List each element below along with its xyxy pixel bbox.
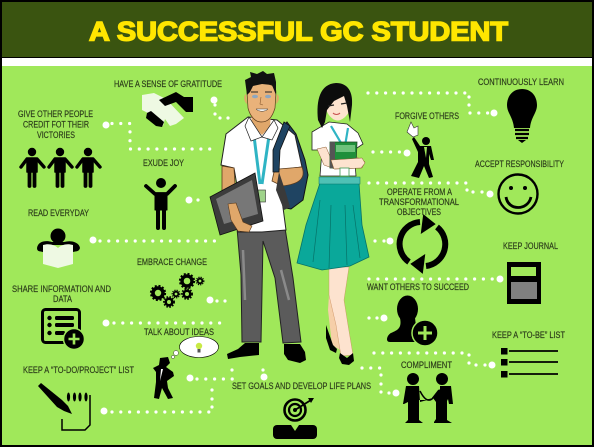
label: read everyday: READ EVERYDAY xyxy=(28,208,89,219)
eyes xyxy=(328,103,347,106)
dotted connector: gratitude xyxy=(210,96,230,120)
brows xyxy=(251,91,272,93)
label: compliment: COMPLIMENT xyxy=(401,360,452,371)
label: credit: CREDIT FOT THEIR xyxy=(23,120,89,130)
header band xyxy=(2,2,592,66)
hand on folder xyxy=(228,203,252,232)
dotted connector: talk about ideas xyxy=(186,368,234,382)
back shoe xyxy=(326,325,337,353)
forearm and fist xyxy=(272,167,303,186)
lanyard and ID xyxy=(254,136,269,184)
dotted connector: set goals xyxy=(260,368,268,380)
skirt pleats xyxy=(313,200,360,268)
shirt xyxy=(221,117,302,232)
nose xyxy=(260,97,263,105)
label: exude joy: EXUDE JOY xyxy=(143,158,184,169)
label: talk about ideas: TALK ABOUT IDEAS xyxy=(144,327,214,338)
folder panel xyxy=(216,180,258,224)
trousers xyxy=(237,228,301,343)
backpack xyxy=(273,122,308,209)
collar xyxy=(245,117,278,141)
icon: forgiving figure pointing xyxy=(407,122,434,178)
dotted connector: continuously learn xyxy=(368,93,498,116)
label: transformational objectives: OPERATE FROM A xyxy=(387,187,452,198)
icon: light bulb xyxy=(507,89,537,143)
icon: to-be list xyxy=(501,348,558,378)
label: credit xyxy=(18,109,93,141)
icon: handshake xyxy=(142,92,193,127)
ID card xyxy=(340,168,349,176)
icon: journal xyxy=(507,262,541,304)
icon: reader with book xyxy=(37,228,80,268)
hair xyxy=(245,71,276,95)
icon: target with arrow xyxy=(273,398,317,439)
icon: data list with plus xyxy=(42,310,84,350)
label: share information: DATA xyxy=(53,294,72,305)
back leg xyxy=(328,265,347,350)
label: transformational objectives xyxy=(379,187,460,218)
dotted connector: to-be list xyxy=(374,353,496,368)
hair xyxy=(318,83,352,128)
label: to-be list: KEEP A “TO-BE” LIST xyxy=(492,330,565,341)
skirt xyxy=(297,183,369,270)
head xyxy=(247,83,276,122)
label: share information xyxy=(12,284,111,305)
label: keep journal: KEEP JOURNAL xyxy=(503,241,558,252)
label: accept responsibility: ACCEPT RESPONSIBILITY xyxy=(475,159,564,170)
dotted connector: embrace change xyxy=(206,296,227,304)
waistband xyxy=(319,177,360,184)
label: set goals: SET GOALS AND DEVELOP LIFE PLANS xyxy=(232,381,371,392)
illustration: male student xyxy=(210,71,308,363)
dotted connector: keep journal xyxy=(369,276,504,282)
ears xyxy=(244,94,279,104)
dotted connector: accept responsibility xyxy=(369,183,494,198)
lanyard xyxy=(331,126,348,148)
mouth xyxy=(333,113,340,114)
label: transformational objectives: TRANSFORMATIONAL xyxy=(379,197,460,208)
bag strap xyxy=(273,122,290,172)
book spine xyxy=(330,142,335,168)
icon: gears xyxy=(151,274,204,307)
icon: cycle arrows xyxy=(400,216,445,272)
label: forgive others: FORGIVE OTHERS xyxy=(395,111,459,122)
dotted connector: exude joy xyxy=(186,196,200,204)
neck xyxy=(251,112,271,135)
bag lower panel xyxy=(276,172,290,210)
upper arm xyxy=(222,166,236,200)
icon: thinking man with idea bubble xyxy=(153,336,218,399)
dotted connector: transformational objectives xyxy=(373,238,394,244)
folder xyxy=(210,173,263,235)
label: embrace change: EMBRACE CHANGE xyxy=(137,257,207,268)
label: continuously learn: CONTINUOUSLY LEARN xyxy=(478,77,564,88)
icon: smiley xyxy=(498,174,538,214)
label: share information: SHARE INFORMATION AND xyxy=(12,284,111,295)
front shoe xyxy=(339,353,354,365)
dotted connector: compliment xyxy=(362,368,400,396)
forearm over book xyxy=(331,158,365,169)
blouse xyxy=(312,122,363,176)
label: credit: GIVE OTHER PEOPLE xyxy=(18,109,93,120)
illustration: female student xyxy=(297,83,369,365)
dotted connector: credit xyxy=(102,122,210,149)
label: gratitude: HAVE A SENSE OF GRATITUDE xyxy=(114,79,222,90)
icon: joyful person xyxy=(146,178,175,228)
shoes xyxy=(227,343,306,363)
icon: person with plus xyxy=(387,296,438,346)
dotted connector: read everyday xyxy=(90,236,215,244)
dotted connector: want others to succeed xyxy=(367,314,388,322)
face details xyxy=(252,95,271,98)
icon: three people xyxy=(21,148,100,186)
title: A SUCCESSFUL GC STUDENT xyxy=(89,16,509,46)
label: transformational objectives: OBJECTIVES xyxy=(397,207,441,218)
dotted connector: forgive others xyxy=(373,150,410,156)
dotted connector: to-do list xyxy=(100,388,214,414)
head xyxy=(325,93,350,121)
front leg xyxy=(329,267,353,356)
label: want others to succeed: WANT OTHERS TO SUCCEED xyxy=(367,282,469,293)
book xyxy=(330,142,357,168)
label: credit: VICTORIES xyxy=(37,130,75,141)
trouser highlights xyxy=(243,250,289,300)
label: to-do list: KEEP A “TO-DO/PROJECT” LIST xyxy=(23,365,134,376)
icon: two people shaking hands xyxy=(403,373,453,423)
ID badge xyxy=(258,190,266,202)
arm and hand xyxy=(317,147,365,169)
book highlight xyxy=(336,145,355,152)
smile xyxy=(256,109,268,111)
dotted connector: share information xyxy=(102,320,220,326)
icon: pen and notepad xyxy=(38,383,90,430)
